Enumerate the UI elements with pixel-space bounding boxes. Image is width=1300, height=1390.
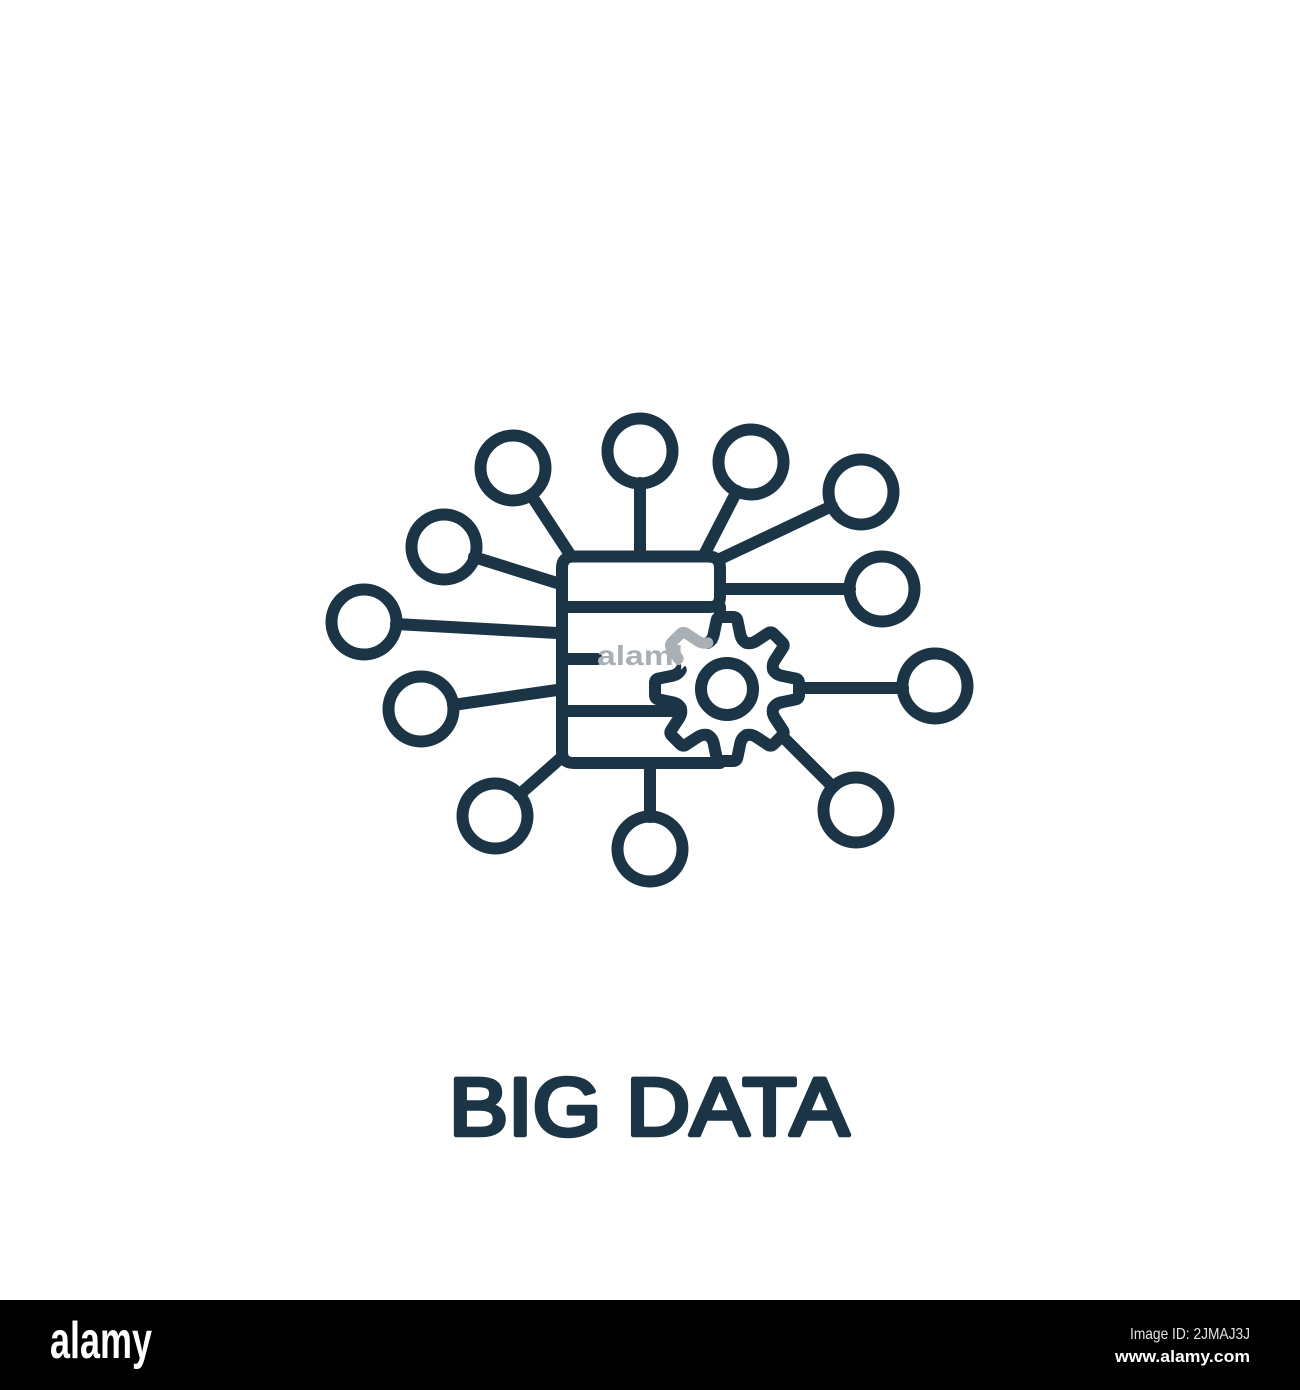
image id: Image ID: 2JMAJ3J — [1130, 1326, 1250, 1343]
watermark fragment over the icon — [597, 625, 708, 671]
title: BIG DATA — [449, 1062, 849, 1153]
website: www.alamy.com — [1114, 1347, 1250, 1366]
icon: big data network — [332, 418, 968, 882]
node circles — [332, 418, 968, 882]
gear — [655, 617, 799, 761]
watermark fragment over the icon: alaml — [597, 640, 683, 671]
footer bar — [0, 1300, 1300, 1390]
connector lines — [396, 483, 903, 817]
database stack — [562, 556, 720, 763]
footer logo: alamy — [50, 1312, 152, 1370]
